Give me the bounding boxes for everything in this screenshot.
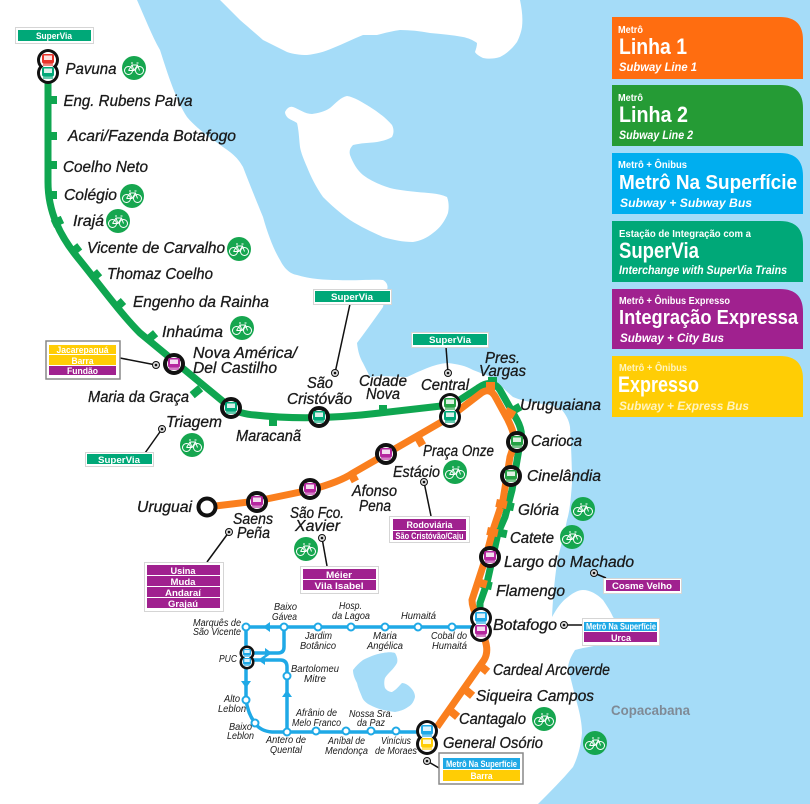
station: Uruguai — [198, 498, 216, 516]
callout: Usina, Muda, Andaraí, Grajaú: Andaraí — [165, 588, 201, 599]
legend: Linha 2: Metrô — [618, 93, 643, 104]
station names: surface line: Marquês de — [193, 618, 241, 629]
station names: main lines: Nova América/ — [193, 345, 299, 362]
callout: Usina, Muda, Andaraí, Grajaú — [144, 528, 232, 612]
station names: main lines: Triagem — [166, 414, 222, 431]
station names: main lines: Flamengo — [496, 583, 565, 600]
legend: Integração Expressa: Integração Expressa — [619, 307, 799, 329]
station names: main lines: General Osório — [443, 735, 543, 752]
legend: Expresso: Expresso — [618, 372, 699, 397]
legend: Integração Expressa: Metrô + Ônibus Expresso — [619, 294, 730, 307]
station: Central — [439, 393, 461, 428]
callout: Cosme Velho: Cosme Velho — [612, 581, 672, 592]
station names: main lines: Cidade — [359, 373, 407, 390]
station names: main lines: Irajá — [73, 213, 104, 230]
callout: Metrô Na Superfície, Urca: Urca — [611, 633, 632, 644]
station names: surface line: Alto — [223, 694, 240, 705]
station names: main lines: Eng. Rubens Paiva — [64, 93, 193, 110]
legend: Integração Expressa — [612, 289, 803, 349]
legend: Linha 2: Subway Line 2 — [619, 128, 693, 142]
callout: Méier, Vila Isabel — [300, 534, 378, 594]
callout: Usina, Muda, Andaraí, Grajaú: Muda — [170, 577, 196, 588]
callout: SuperVia at Triagem — [86, 426, 166, 466]
station names: main lines: Pres. — [485, 350, 520, 367]
station names: surface line: da Lagoa — [332, 611, 370, 622]
callout: Usina, Muda, Andaraí, Grajaú: Grajaú — [168, 599, 198, 610]
station names: main lines: Largo do Machado — [504, 554, 634, 571]
station names: surface line: Bartolomeu — [291, 664, 339, 675]
station names: main lines: Colégio — [64, 187, 117, 204]
callout: Rodoviária, São Cristóvão/Caju: São Cristóvão/Caju — [396, 531, 464, 542]
callout: Rodoviária, São Cristóvão/Caju: Rodoviária — [406, 520, 453, 531]
station names: surface line: Vinícius — [381, 736, 411, 747]
legend: Metrô Na Superfície — [612, 153, 803, 214]
station names: surface line: Baixo — [274, 602, 297, 613]
station names: main lines: Xavier — [294, 518, 341, 535]
line 2 track (green) — [48, 80, 521, 615]
callout: Metrô Na Superfície, Urca: Metrô Na Superfície — [586, 622, 656, 632]
callout: Méier, Vila Isabel: Vila Isabel — [314, 581, 364, 592]
station names: main lines: Del Castilho — [193, 360, 277, 377]
station names: surface line: Mitre — [304, 674, 326, 685]
station names: surface line: Hosp. — [339, 601, 362, 612]
station: PUC — [240, 646, 254, 670]
station names: surface line: Humaitá — [432, 641, 467, 652]
station: Triagem — [222, 399, 240, 417]
station: Carioca — [508, 433, 526, 451]
legend: Metrô Na Superfície: Metrô + Ônibus — [618, 158, 687, 171]
legend: SuperVia: Interchange with SuperVia Trains — [619, 263, 787, 277]
station names: surface line: Leblon — [227, 731, 254, 742]
legend: SuperVia — [612, 221, 803, 282]
station names: surface line: da Paz — [357, 718, 385, 729]
callout: Jacarepaguá, Barra, Fundão: Jacarepaguá — [56, 345, 109, 356]
callout: Jacarepaguá, Barra, Fundão — [46, 341, 160, 379]
station names: main lines: Acari/Fazenda Botafogo — [67, 128, 236, 145]
station names: main lines: Catete — [510, 530, 554, 547]
station names: main lines: Cardeal Arcoverde — [493, 662, 610, 679]
callout: Rodoviária, São Cristóvão/Caju — [390, 478, 470, 542]
station names: surface line: Baixo — [229, 722, 252, 733]
station: São Cristóvão — [310, 408, 328, 426]
bike icons — [106, 56, 607, 755]
station names: main lines: Nova — [366, 386, 400, 403]
legend: Integração Expressa: Subway + City Bus — [620, 331, 724, 345]
station names: surface line: Maria — [373, 631, 397, 642]
station: Pavuna — [37, 49, 59, 84]
station names: main lines: Inhaúma — [162, 324, 223, 341]
station names: main lines: Botafogo — [493, 617, 557, 634]
station names: main lines: Uruguai — [137, 499, 193, 516]
station names: main lines: Maria da Graça — [88, 389, 189, 406]
green station ticks — [48, 96, 522, 590]
blue surface line — [240, 622, 481, 736]
orange station ticks — [348, 382, 516, 720]
legend: Metrô Na Superfície: Subway + Subway Bus — [620, 196, 752, 210]
station names: main lines: Central — [421, 377, 470, 394]
station names: surface line: São Vicente — [193, 627, 241, 638]
station: Largo do Machado — [481, 548, 499, 566]
legend: Linha 2 — [612, 85, 803, 146]
lagoon: Rodrigo de Freitas — [353, 652, 415, 712]
station names: surface line: Quental — [270, 745, 303, 756]
callout: SuperVia at Central — [412, 332, 488, 376]
station names: main lines: Cantagalo — [459, 711, 526, 728]
station names: surface line: Nossa Sra. — [349, 709, 393, 720]
island: Ilha do Governador — [285, 96, 449, 242]
callout: Méier, Vila Isabel: Méier — [326, 570, 352, 581]
legend: Expresso: Subway + Express Bus — [619, 399, 749, 413]
station: Estácio — [377, 445, 395, 463]
legend: Expresso — [612, 356, 803, 417]
station names: surface line: Antero de — [265, 735, 306, 746]
legend: Linha 1: Linha 1 — [619, 34, 687, 59]
station names: main lines: Cristóvão — [287, 391, 352, 408]
station names: main lines: Coelho Neto — [63, 159, 148, 176]
legend: Linha 2: Linha 2 — [619, 102, 688, 127]
station names: main lines: Siqueira Campos — [476, 688, 594, 705]
callout: SuperVia at Triagem: SuperVia — [98, 455, 141, 466]
station names: surface line: Cobal do — [431, 631, 467, 642]
station names: main lines: Glória — [518, 502, 559, 519]
station names: surface line: Leblon — [218, 704, 246, 715]
station names: main lines — [63, 61, 634, 752]
callout: Jacarepaguá, Barra, Fundão: Fundão — [67, 366, 98, 377]
station names: main lines: Uruguaiana — [520, 397, 601, 414]
station names: surface line: de Moraes — [375, 746, 417, 757]
station: Saens Peña — [248, 493, 266, 511]
callout: SuperVia at Central: SuperVia — [429, 335, 472, 346]
station names: main lines: Cinelândia — [527, 468, 601, 485]
station names: main lines: São Fco. — [290, 505, 344, 522]
legend: Linha 1: Subway Line 1 — [619, 60, 697, 74]
legend: Linha 1 — [612, 17, 803, 79]
callout: Metrô Na Superfície, Urca — [560, 618, 660, 646]
station names: main lines: Saens — [233, 511, 273, 528]
callout: Cosme Velho — [590, 570, 682, 594]
station names: surface line: Jardim — [304, 631, 332, 642]
line 1 track (orange) — [207, 391, 514, 727]
legend: SuperVia: SuperVia — [619, 238, 700, 263]
legend: Expresso: Metrô + Ônibus — [619, 361, 687, 374]
station: Cinelândia — [502, 467, 520, 485]
station names: main lines: Pavuna — [66, 61, 117, 78]
callout: SuperVia at São Cristóvão: SuperVia — [331, 292, 374, 303]
station names: surface line — [193, 601, 467, 757]
station names: main lines: Pena — [359, 498, 391, 515]
station names: surface line: Melo Franco — [292, 718, 341, 729]
station names: main lines: Afonso — [351, 483, 397, 500]
station names: main lines: Praça Onze — [423, 443, 494, 460]
station names: main lines: Engenho da Rainha — [133, 294, 269, 311]
callout: SuperVia at Pavuna — [16, 28, 94, 44]
callout: Metrô Na Superfície, Barra: Metrô Na Superfície — [446, 759, 517, 770]
callout: SuperVia at Pavuna: SuperVia — [36, 31, 73, 42]
station names: main lines: Estácio — [393, 464, 440, 481]
station names: main lines: São — [307, 375, 333, 392]
callout: SuperVia at São Cristóvão — [314, 290, 392, 376]
arrows on blue line — [241, 622, 292, 697]
legend: SuperVia: Estação de Integração com a — [619, 229, 751, 240]
callout: Metrô Na Superfície, Barra — [424, 753, 523, 784]
callout: Metrô Na Superfície, Barra: Barra — [470, 771, 493, 782]
station: Nova América — [165, 355, 183, 373]
station names: surface line: Mendonça — [325, 746, 368, 757]
station names: surface line: Botânico — [300, 641, 336, 652]
station: Botafogo — [470, 607, 492, 642]
station names: surface line: Gávea — [272, 612, 297, 623]
station names: main lines: Vicente de Carvalho — [87, 240, 225, 257]
station: São Francisco Xavier — [301, 480, 319, 498]
station names: main lines: Maracanã — [236, 428, 301, 445]
station: General Osório — [416, 720, 438, 755]
callout: Usina, Muda, Andaraí, Grajaú: Usina — [170, 566, 196, 577]
legend: Linha 1: Metrô — [618, 25, 643, 36]
station names: main lines: Carioca — [531, 433, 582, 450]
station names: surface line: Afrânio de — [295, 708, 337, 719]
station names: surface line: Angélica — [366, 641, 403, 652]
label: Copacabana: Copacabana — [611, 702, 690, 718]
callout: Jacarepaguá, Barra, Fundão: Barra — [72, 356, 94, 367]
station names: main lines: Thomaz Coelho — [107, 266, 213, 283]
blue line stops — [242, 624, 456, 736]
station names: main lines: Vargas — [479, 363, 526, 380]
station names: surface line: PUC — [219, 654, 238, 665]
legend: Metrô Na Superfície: Metrô Na Superfície — [619, 172, 797, 194]
station names: surface line: Aníbal de — [327, 736, 365, 747]
station names: surface line: Humaitá — [401, 611, 436, 622]
station names: main lines: Peña — [237, 525, 270, 542]
